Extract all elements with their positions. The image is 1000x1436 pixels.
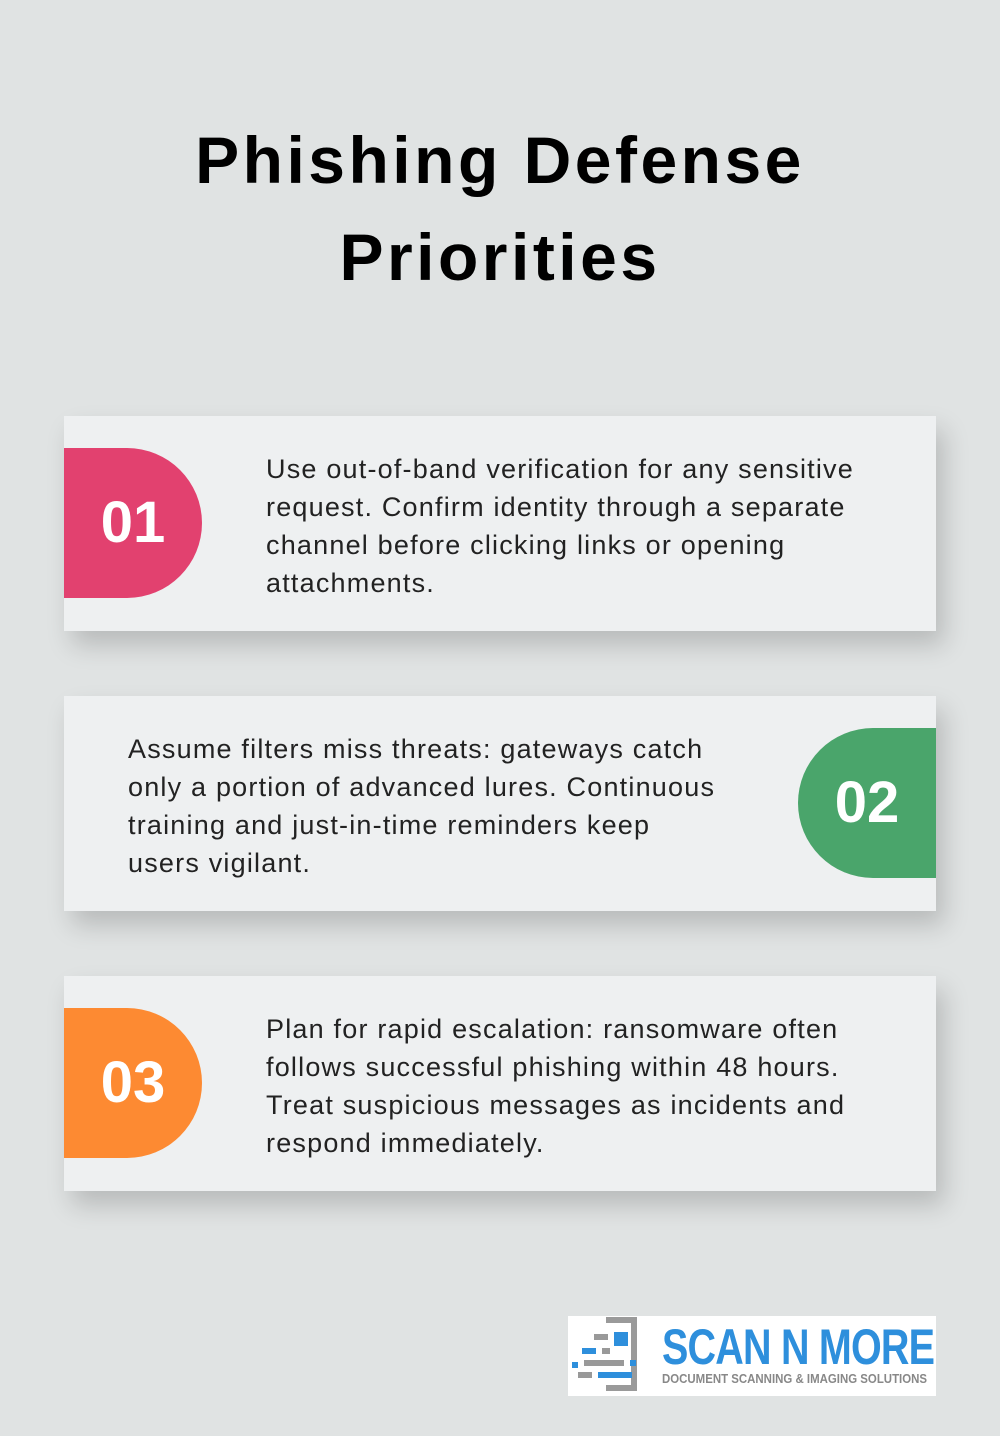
text 02: Assume filters miss threats: gateways catch only a portion of advanced lures. Continuous training and just-in-time reminders keep users vigilant.	[128, 734, 715, 878]
badge 03: 03	[101, 1050, 165, 1115]
badge 01: 01	[101, 490, 165, 555]
title: Phishing Defense	[195, 123, 805, 197]
text 03: Plan for rapid escalation: ransomware often follows successful phishing within 48 hours. Treat suspicious messages as incidents and respond immediately.	[266, 1014, 845, 1158]
badge 01	[64, 448, 202, 598]
icon: scan	[572, 1317, 637, 1391]
badge 02: 02	[835, 770, 899, 835]
panel: card 03	[64, 976, 936, 1191]
badge 02	[798, 728, 936, 878]
badge 03	[64, 1008, 202, 1158]
title	[195, 123, 805, 294]
logo: DOCUMENT SCANNING & IMAGING SOLUTIONS	[662, 1371, 927, 1386]
text 01: Use out-of-band verification for any sensitive request. Confirm identity through a separate channel before clicking links or opening attachments.	[266, 454, 854, 598]
logo	[568, 1316, 936, 1396]
logo text: SCAN N MORE	[662, 1319, 934, 1375]
title: Priorities	[339, 220, 661, 294]
panel: card 02	[64, 696, 936, 911]
panel: card 01	[64, 416, 936, 631]
